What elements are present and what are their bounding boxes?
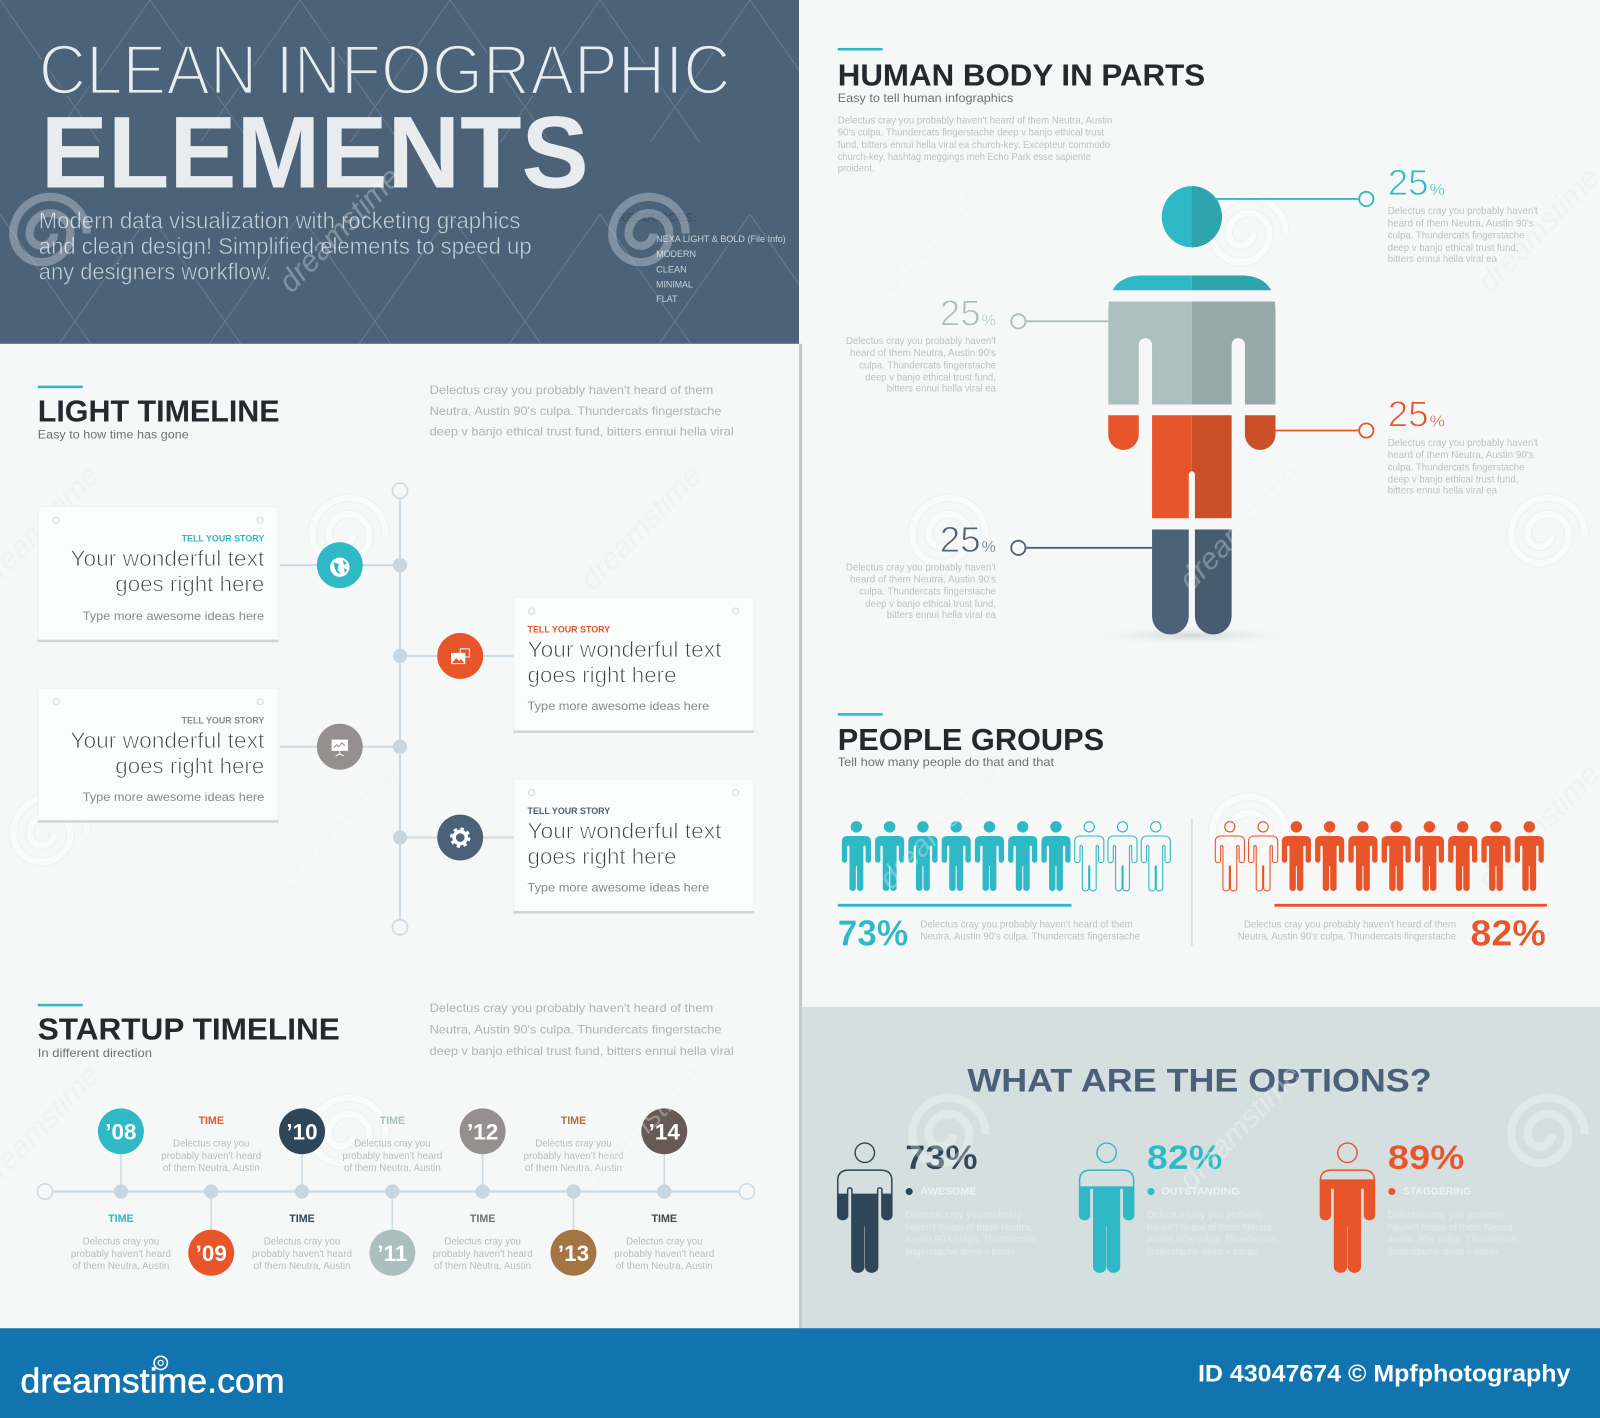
heading: options: WHAT ARE THE OPTIONS? — [967, 1062, 1432, 1099]
time labels: TIME — [289, 1213, 315, 1225]
option: 73% awesome: Delectus cray you probably — [905, 1210, 1022, 1221]
header description: Modern data visualization with rocketing graphics — [39, 208, 520, 234]
time descriptions: probably haven't heard — [161, 1151, 261, 1162]
card: teal story: Your wonderful text — [70, 546, 265, 571]
panel: startup timeline — [37, 1001, 755, 1276]
card: teal story: TELL YOUR STORY — [182, 534, 264, 544]
callout: torso 25%: heard of them Neutra, Austin 90's — [850, 348, 996, 359]
time labels: TIME — [561, 1115, 586, 1127]
person gauge orange — [1320, 1143, 1374, 1272]
option: 82% outstanding: fingerstache deep v banjo — [1147, 1247, 1258, 1258]
card: teal story: goes right here — [115, 572, 264, 597]
panel: human body — [838, 48, 1538, 646]
time descriptions: Delectus cray you — [354, 1139, 431, 1150]
heading: light timeline: LIGHT TIMELINE — [38, 394, 280, 428]
option: 82% outstanding: haven't heard of them Neutra, — [1147, 1222, 1274, 1233]
time descriptions — [71, 1139, 714, 1272]
watermark overlay: dreamstime — [272, 160, 407, 299]
heading: people groups: PEOPLE GROUPS — [838, 723, 1104, 757]
panel: people groups — [838, 713, 1547, 954]
time descriptions: probably haven't heard — [342, 1151, 442, 1162]
human body intro text: church-key, hashtag meggings meh Echo Park esse sapiente — [838, 152, 1091, 163]
time labels: TIME — [108, 1213, 134, 1225]
time descriptions: probably haven't heard — [523, 1151, 623, 1162]
heading: startup timeline — [38, 1004, 340, 1060]
card: grey story: Your wonderful text — [70, 728, 265, 753]
option: 73% awesome: fingerstache deep v banjo — [905, 1247, 1016, 1258]
callout: torso 25%: 25 — [940, 293, 981, 333]
callout: torso 25%: % — [982, 312, 996, 329]
heading: human body in parts: Easy to tell human infographics — [838, 91, 1013, 105]
heading: people groups — [838, 713, 1104, 769]
figure torso and arms — [1108, 302, 1276, 404]
callout: torso 25%: deep v banjo ethical trust fund, — [865, 373, 996, 384]
option: 89% staggering: Austin 90's culpa. Thundercats — [1388, 1235, 1519, 1246]
callout: torso 25%: culpa. Thundercats fingerstache — [859, 360, 996, 371]
human body intro text — [838, 115, 1112, 174]
startup timeline intro text: Delectus cray you probably haven't heard of them — [430, 1001, 713, 1015]
people row: teal 73% — [842, 821, 1170, 891]
watermark overlay: dreamstime — [1172, 458, 1307, 597]
card: grey story: goes right here — [115, 753, 264, 778]
startup timeline intro text — [430, 1001, 734, 1058]
callout: legs 25%: bitters ennui hella viral ea — [887, 610, 996, 621]
watermark overlay: dreamstime — [272, 757, 407, 896]
light timeline intro text: Neutra, Austin 90's culpa. Thundercats fingerstache — [430, 404, 722, 418]
option: 73% awesome: 73% — [905, 1139, 978, 1177]
resources list: MODERN — [656, 249, 696, 259]
title line two: ELEMENTS — [41, 96, 589, 210]
callout: hips 25%: culpa. Thundercats fingerstache — [1388, 462, 1524, 473]
time descriptions: of them Neutra, Austin — [434, 1261, 531, 1272]
resources list: MINIMAL — [656, 280, 693, 290]
option: 82% outstanding — [1080, 1139, 1279, 1272]
heading: human body in parts: HUMAN BODY IN PARTS — [838, 59, 1205, 93]
stat: 82%: Delectus cray you probably haven't heard of them — [1244, 919, 1456, 930]
footer image id: ID 43047674 © Mpfphotography — [1198, 1360, 1571, 1387]
time labels — [108, 1115, 677, 1225]
watermark overlay: dreamstime — [1172, 1058, 1307, 1197]
light timeline intro text: deep v banjo ethical trust fund, bitters ennui hella viral — [430, 425, 734, 439]
year markers: ’11 — [377, 1241, 407, 1266]
human body intro text: proident. — [838, 163, 874, 174]
figure hands and hips — [1108, 415, 1276, 518]
callout: hips 25% — [1276, 394, 1538, 497]
stat: 73%: 73% — [838, 914, 908, 954]
callout: torso 25%: Delectus cray you probably haven't — [846, 336, 996, 347]
option: 73% awesome: Austin 90's culpa. Thundercats — [905, 1235, 1037, 1246]
callout: legs 25% — [846, 520, 1152, 621]
icon: picture — [437, 633, 483, 679]
callout: head 25%: heard of them Neutra, Austin 90's — [1388, 218, 1534, 229]
human body intro text: fund, bitters ennui hella viral ea church-key. Excepteur commodo — [838, 140, 1111, 151]
resources list: FLAT — [656, 294, 678, 304]
card: teal story — [38, 507, 279, 642]
vertical timeline axis — [280, 483, 513, 935]
icon: presentation board — [317, 724, 363, 770]
panel: header — [0, 0, 799, 344]
option: 73% awesome: haven't heard of them Neutra, — [905, 1222, 1033, 1233]
light timeline intro text — [430, 383, 734, 439]
time descriptions: Delectus cray you — [264, 1237, 340, 1248]
time descriptions: Delectus cray you — [444, 1237, 521, 1248]
card: orange story: goes right here — [528, 662, 677, 687]
header description: and clean design! Simplified elements to speed up — [39, 233, 532, 259]
callout: head 25%: deep v banjo ethical trust fund, — [1388, 243, 1518, 254]
stat: 82%: Neutra, Austin 90's culpa. Thundercats fingerstache — [1238, 932, 1456, 943]
time descriptions: Delectus cray you — [83, 1237, 159, 1248]
option: 89% staggering: STAGGERING — [1403, 1187, 1472, 1198]
watermark overlay — [13, 160, 1585, 1197]
heading: light timeline — [38, 386, 280, 442]
card: orange story: Type more awesome ideas here — [528, 699, 709, 713]
option: 89% staggering: Delectus cray you probably — [1388, 1210, 1504, 1221]
callout: legs 25%: % — [982, 539, 996, 556]
title line one: CLEAN INFOGRAPHIC — [39, 30, 731, 109]
panel: light timeline — [38, 383, 754, 935]
time descriptions: of them Neutra, Austin — [72, 1261, 169, 1272]
card: dark story: goes right here — [528, 844, 677, 869]
callout: hips 25%: % — [1430, 413, 1445, 430]
time descriptions: probably haven't heard — [252, 1249, 352, 1260]
time descriptions: Delectus cray you — [173, 1139, 249, 1150]
faint watermark under content: dreamstime — [872, 757, 1007, 896]
time descriptions: of them Neutra, Austin — [163, 1163, 260, 1174]
icon: globe — [317, 542, 363, 588]
callout: legs 25%: 25 — [940, 520, 981, 560]
card: dark story — [513, 779, 754, 914]
person gauge dark — [838, 1143, 892, 1272]
time descriptions: probably haven't heard — [614, 1249, 714, 1260]
option: 82% outstanding: 82% — [1147, 1139, 1222, 1177]
callout: hips 25%: 25 — [1388, 394, 1429, 434]
time descriptions: Delectus cray you — [535, 1139, 612, 1150]
human figure — [1108, 186, 1276, 635]
header description — [39, 208, 532, 285]
figure lower legs — [1152, 530, 1232, 634]
watermark overlay: dreamstime — [872, 160, 1007, 299]
option: 73% awesome — [838, 1139, 1037, 1272]
year markers: ’12 — [467, 1120, 498, 1144]
figure shoulders — [1112, 276, 1272, 290]
time descriptions: probably haven't heard — [433, 1249, 533, 1260]
callout: torso 25% — [846, 293, 1108, 395]
time labels: TIME — [380, 1115, 405, 1127]
year markers: ’08 — [105, 1120, 137, 1144]
card: orange story — [513, 597, 754, 733]
faint watermark under content: dreamstime — [872, 160, 1007, 299]
heading: light timeline: Easy to how time has gone — [38, 428, 189, 442]
faint watermark under content: dreamstime — [573, 1058, 709, 1197]
stat: 73%: Neutra, Austin 90's culpa. Thundercats fingerstache — [920, 932, 1140, 943]
card: grey story: Type more awesome ideas here — [83, 790, 264, 804]
faint watermark under content — [0, 160, 1600, 1197]
option: 89% staggering: fingerstache deep v banjo — [1388, 1247, 1499, 1258]
ground shadow — [1078, 625, 1306, 646]
time descriptions: of them Neutra, Austin — [344, 1163, 441, 1174]
human body intro text: 90's culpa. Thundercats fingerstache deep v banjo ethical trust — [838, 128, 1104, 139]
panel: what are the options — [802, 1007, 1600, 1328]
callout: head 25%: culpa. Thundercats fingerstache — [1388, 231, 1524, 242]
person gauge teal — [1080, 1143, 1134, 1272]
year markers — [98, 1108, 687, 1276]
heading: startup timeline: STARTUP TIMELINE — [38, 1013, 340, 1047]
callout: hips 25%: bitters ennui hella viral ea — [1388, 486, 1497, 497]
callout: head 25%: % — [1430, 182, 1445, 199]
time descriptions: of them Neutra, Austin — [525, 1163, 622, 1174]
stat: 82%: 82% — [1470, 914, 1546, 954]
callout: head 25%: 25 — [1388, 163, 1429, 203]
card: dark story: Your wonderful text — [528, 819, 722, 844]
option: 73% awesome: AWESOME — [920, 1187, 977, 1198]
resources list — [617, 210, 786, 304]
time labels: TIME — [198, 1115, 224, 1127]
heading: people groups: Tell how many people do that and that — [838, 755, 1055, 769]
option: 82% outstanding: Delectus cray you probably — [1147, 1210, 1263, 1221]
card: grey story — [38, 688, 279, 823]
card: grey story: TELL YOUR STORY — [182, 715, 264, 725]
callout: head 25%: Delectus cray you probably haven't — [1388, 206, 1538, 217]
figure head — [1162, 186, 1222, 247]
human body intro text: Delectus cray you probably haven't heard of them Neutra, Austin — [838, 115, 1112, 126]
card: orange story: Your wonderful text — [528, 637, 722, 662]
callout: hips 25%: deep v banjo ethical trust fund, — [1388, 475, 1518, 486]
callout: legs 25%: culpa. Thundercats fingerstache — [859, 587, 996, 598]
faint watermark under content: dreamstime — [1172, 458, 1307, 597]
light timeline intro text: Delectus cray you probably haven't heard of them — [430, 383, 713, 397]
stat: 73% — [838, 904, 1140, 954]
year markers: ’14 — [649, 1120, 680, 1144]
time descriptions: of them Neutra, Austin — [254, 1261, 351, 1272]
year markers: ’09 — [196, 1241, 227, 1266]
header description: any designers workflow. — [39, 259, 271, 285]
time labels: TIME — [470, 1213, 495, 1225]
callout: hips 25%: Delectus cray you probably haven't — [1388, 438, 1538, 449]
startup timeline intro text: Neutra, Austin 90's culpa. Thundercats fingerstache — [430, 1022, 722, 1036]
people row: orange 82% — [1215, 821, 1544, 891]
footer logo: dreamstime.com — [20, 1363, 285, 1400]
time descriptions: Delectus cray you — [626, 1237, 703, 1248]
option: 89% staggering: haven't heard of them Neutra, — [1388, 1222, 1515, 1233]
callout: legs 25%: heard of them Neutra, Austin 90's — [850, 575, 996, 586]
callout: torso 25%: bitters ennui hella viral ea — [887, 384, 996, 395]
option: 82% outstanding: OUTSTANDING — [1161, 1187, 1240, 1198]
year markers: ’13 — [558, 1241, 589, 1266]
heading: human body in parts — [838, 48, 1205, 105]
callout: legs 25%: Delectus cray you probably haven't — [846, 562, 996, 573]
footer bar — [0, 1328, 1600, 1418]
startup timeline intro text: deep v banjo ethical trust fund, bitters ennui hella viral — [430, 1044, 734, 1058]
card: teal story: Type more awesome ideas here — [83, 609, 264, 623]
callout: head 25% — [1214, 163, 1538, 265]
faint watermark under content: dreamstime — [573, 458, 709, 597]
time descriptions: probably haven't heard — [71, 1249, 171, 1260]
watermark overlay: dreamstime — [573, 1058, 709, 1197]
icon: gear — [437, 815, 483, 860]
watermark overlay: dreamstime — [872, 757, 1007, 896]
card: orange story: TELL YOUR STORY — [528, 624, 610, 634]
faint watermark under content: dreamstime — [272, 757, 407, 896]
heading: startup timeline: In different direction — [38, 1046, 152, 1060]
callout: head 25%: bitters ennui hella viral ea — [1388, 254, 1497, 265]
stat: 73%: Delectus cray you probably haven't heard of them — [920, 919, 1133, 930]
stat: 82% — [1238, 904, 1547, 954]
time labels: TIME — [652, 1213, 677, 1225]
resources list: RESOURCES: — [617, 210, 697, 224]
card: dark story: Type more awesome ideas here — [528, 881, 709, 895]
callout: legs 25%: deep v banjo ethical trust fund, — [865, 599, 996, 610]
year markers: ’10 — [286, 1120, 318, 1144]
time descriptions: of them Neutra, Austin — [616, 1261, 713, 1272]
option: 82% outstanding: Austin 90's culpa. Thundercats — [1147, 1235, 1279, 1246]
option: 89% staggering — [1320, 1139, 1519, 1272]
resources list: CLEAN — [656, 264, 687, 274]
callout: hips 25%: heard of them Neutra, Austin 90's — [1388, 450, 1534, 461]
option: 89% staggering: 89% — [1388, 1139, 1464, 1177]
resources list: NEXA LIGHT & BOLD (File Info) — [656, 234, 786, 244]
card: dark story: TELL YOUR STORY — [528, 806, 610, 816]
horizontal timeline axis — [37, 1153, 755, 1231]
